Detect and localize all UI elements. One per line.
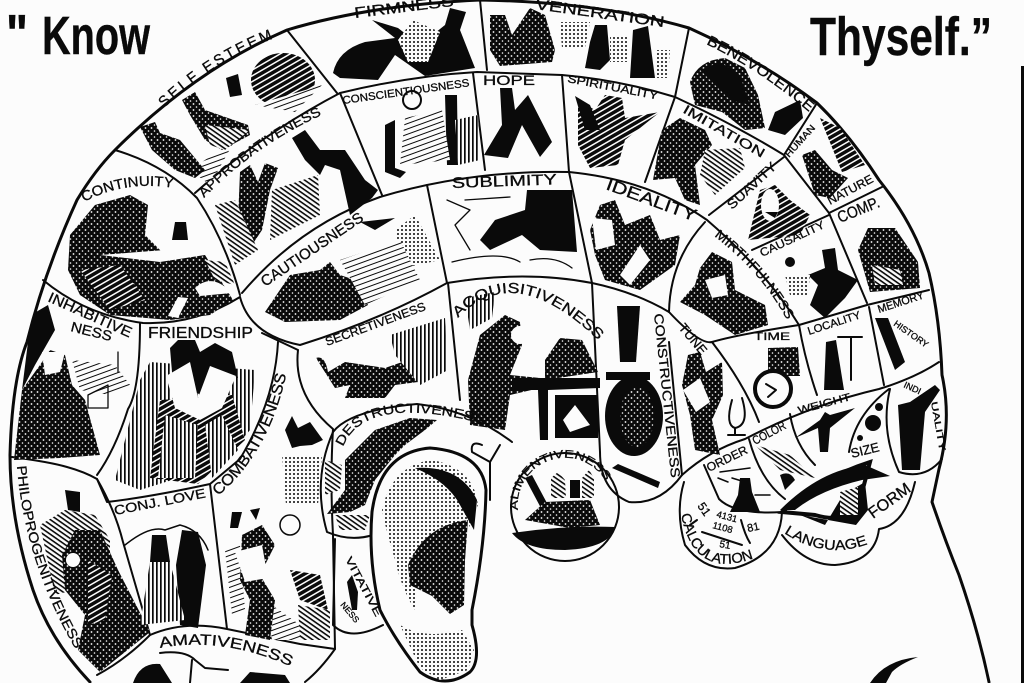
- panel: calculation: 51: [695, 500, 714, 519]
- panel: benevolence: BENEVOLENCE: [707, 36, 815, 112]
- panel: continuity: CONTINUITY: [82, 176, 174, 200]
- panel: approbativeness: [200, 108, 378, 265]
- panel: secretiveness: SECRETIVENESS: [323, 299, 428, 349]
- panel: form: FORM: [865, 480, 914, 522]
- panel: color: [750, 418, 815, 490]
- panel: spirituality: SPIRITUALITY: [566, 73, 660, 103]
- panel: destructiveness: [325, 404, 501, 530]
- panel: firmness: [333, 0, 475, 80]
- panel: self esteem: [140, 29, 322, 185]
- panel: amativeness: AMATIVENESS: [160, 634, 293, 665]
- title: Know: [6, 4, 151, 66]
- panel: order: ORDER: [704, 443, 750, 475]
- panel: calculation: 51: [718, 539, 732, 552]
- panel: cautiousness: CAUTIOUSNESS: [258, 209, 367, 290]
- panel: vitativeness: [338, 555, 384, 625]
- panel: individuality: INDI: [902, 380, 923, 396]
- panel: approbativeness: APPROBATIVENESS: [200, 108, 320, 198]
- panel: suavity: SUAVITY: [724, 159, 780, 212]
- ear: [371, 448, 486, 681]
- panel: tune: [676, 320, 745, 455]
- panel: size: [849, 403, 883, 461]
- panel: time: TIME: [754, 331, 790, 343]
- panel: imitation: [653, 102, 768, 205]
- panel: vitativeness: NESS: [338, 600, 362, 625]
- panel: memory and history: MEMORY: [876, 289, 926, 316]
- panel: philoprogenitiveness: [16, 466, 149, 672]
- panel: philoprogenitiveness: PHILOPROGENITIVENESS: [16, 466, 82, 648]
- panel: time: [754, 331, 800, 407]
- panel: cautiousness: [258, 209, 440, 322]
- panel: calculation: [682, 500, 761, 564]
- panel: amativeness: [133, 634, 293, 683]
- panel: ideality: [590, 175, 699, 290]
- panel: hope: HOPE: [483, 72, 535, 88]
- panel: friendship: FRIENDSHIP: [148, 325, 253, 342]
- panel: vitativeness: VITATIVE: [342, 555, 384, 619]
- panel: spirituality: [566, 73, 660, 168]
- panel: language: LANGUAGE: [784, 525, 868, 550]
- panel: color: COLOR: [750, 418, 788, 448]
- panel: memory and history: [875, 289, 930, 370]
- panel: weight: WEIGHT: [797, 391, 853, 417]
- panel: inhabitiveness: INHABITIVE: [45, 290, 134, 341]
- panel: acquisitiveness: ACQUISITIVENESS: [454, 282, 604, 339]
- panel: comp: [835, 194, 920, 292]
- panel: human nature: HUMAN: [783, 123, 818, 160]
- panel: order: [704, 443, 770, 512]
- title: Know: ": [6, 4, 28, 64]
- panel: inhabitiveness: [14, 290, 134, 460]
- panel: benevolence: [690, 36, 815, 135]
- panel: self esteem: SELF ESTEEM: [158, 29, 272, 106]
- panel: calculation: 1108: [711, 520, 734, 536]
- panel: inhabitiveness: NESS: [69, 318, 114, 344]
- panel: sublimity: [447, 171, 577, 268]
- title: Know: Know: [42, 6, 151, 66]
- panel: ideality: IDEALITY: [604, 175, 699, 225]
- panel: calculation: 81: [746, 521, 761, 535]
- panel: causality: CAUSALITY: [758, 219, 827, 260]
- lip fragment at bottom right: [870, 657, 918, 683]
- panel: tune: TUNE: [676, 320, 711, 358]
- panel: constructiveness: [605, 306, 683, 488]
- panel: destructiveness: DESTRUCTIVENESS: [335, 404, 482, 446]
- panel: imitation: IMITATION: [680, 102, 768, 161]
- panel: memory and history: HISTORY: [892, 318, 930, 350]
- panel: causality: [758, 219, 858, 318]
- panel: mirthfulness: MIRTHFULNESS: [714, 230, 794, 319]
- panel: continuity: [68, 176, 234, 320]
- panel: suavity: [724, 159, 810, 240]
- panel: sublimity: SUBLIMITY: [452, 171, 557, 192]
- panel: calculation: CALCULATION: [682, 514, 752, 564]
- panel: size: SIZE: [849, 439, 881, 461]
- panel: comp: COMP.: [835, 194, 882, 227]
- panel: hope: [483, 72, 552, 158]
- panel: alimentiveness: [510, 450, 614, 550]
- panel: human nature: [783, 118, 876, 208]
- panel: locality: LOCALITY: [806, 309, 863, 338]
- panel: conscientiousness: CONSCIENTIOUSNESS: [342, 77, 470, 107]
- eye: [780, 462, 890, 525]
- panel: secretiveness: [316, 299, 448, 398]
- panel: locality: [806, 309, 863, 390]
- panel: veneration: [490, 0, 670, 78]
- panel: individuality: [898, 380, 948, 470]
- photo edge at right: [1021, 66, 1024, 683]
- panel: alimentiveness: ALIMENTIVENESS: [510, 450, 611, 510]
- panel: weight: [795, 391, 855, 452]
- panel: human nature: NATURE: [825, 172, 876, 208]
- panel: constructiveness: CONSTRUCTIVENESS: [651, 313, 683, 479]
- panel: conscientiousness: [342, 77, 480, 178]
- panel: calculation: 4131: [715, 509, 738, 525]
- panel: individuality: UALITY: [929, 401, 948, 452]
- panel: combativeness: [213, 373, 330, 640]
- panel: conj love: CONJ. LOVE: [113, 485, 207, 518]
- panel: acquisitiveness: [454, 282, 604, 440]
- panel: combativeness: COMBATIVENESS: [213, 373, 286, 494]
- panel: mirthfulness: [680, 230, 794, 335]
- panel: friendship: [115, 325, 255, 490]
- panel: conj love: [113, 485, 208, 628]
